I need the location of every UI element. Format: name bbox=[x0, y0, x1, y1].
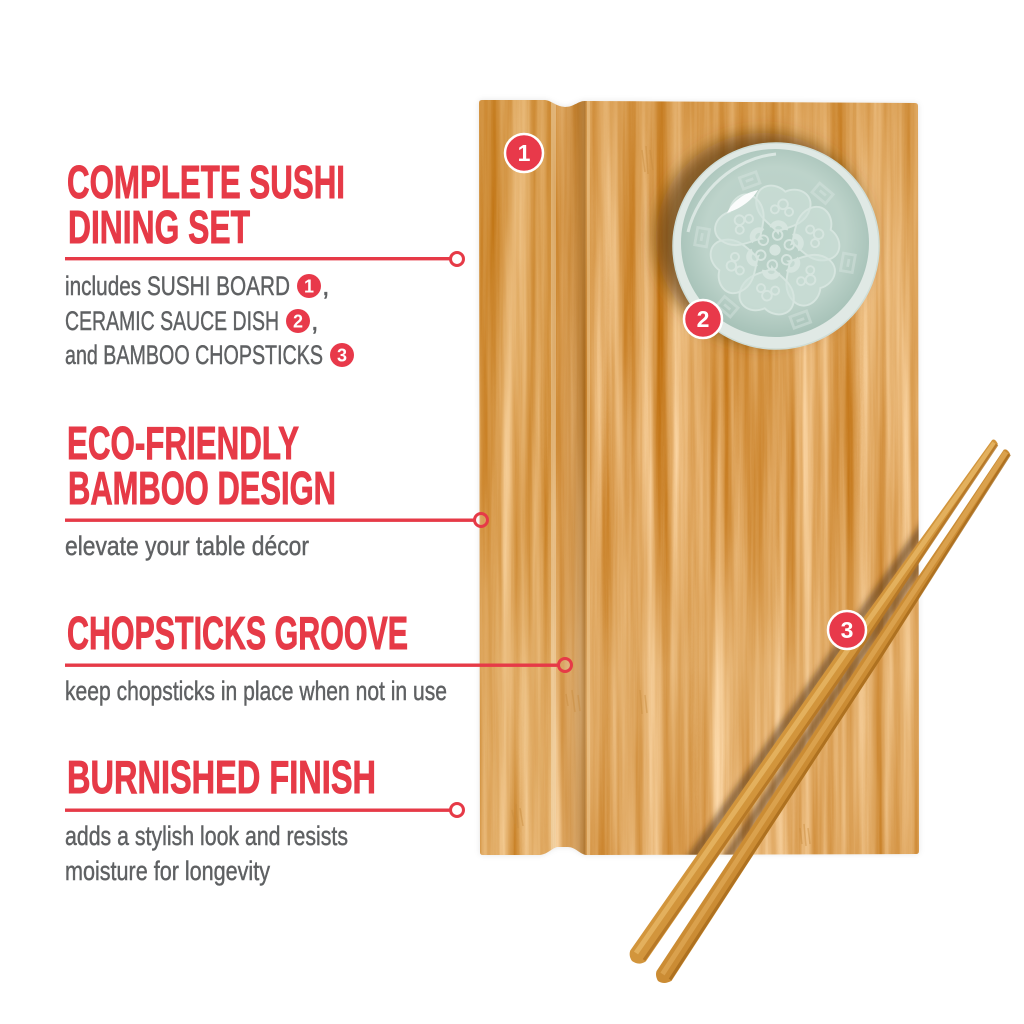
badge 2 bbox=[684, 300, 722, 338]
leader line bbox=[65, 804, 464, 816]
chopsticks groove bbox=[551, 95, 590, 860]
description line 2: CERAMIC SAUCE DISH bbox=[65, 306, 279, 336]
description line 3: 3 bbox=[337, 346, 347, 366]
chopstick right bbox=[656, 449, 1010, 983]
feature: complete sushi dining set bbox=[65, 156, 464, 370]
description: elevate your table décor bbox=[65, 531, 309, 561]
leader line bbox=[65, 658, 572, 672]
infographic bbox=[65, 98, 1011, 983]
heading second line: DINING SET bbox=[68, 201, 250, 253]
heading: COMPLETE SUSHI bbox=[67, 156, 345, 208]
heading: CHOPSTICKS GROOVE bbox=[67, 607, 408, 659]
badge 1 bbox=[505, 134, 543, 172]
icon: ceramic sauce dish bbox=[673, 143, 879, 349]
description line 2: , bbox=[311, 306, 319, 336]
icon: bamboo chopsticks bbox=[630, 440, 1010, 983]
dish shadow bbox=[656, 133, 870, 343]
description: keep chopsticks in place when not in use bbox=[65, 676, 447, 706]
description line 1: includes SUSHI BOARD bbox=[65, 271, 290, 301]
feature: burnished finish bbox=[65, 751, 464, 886]
description line 1: 1 bbox=[304, 276, 314, 296]
description line 1: , bbox=[322, 271, 330, 301]
badge 3 bbox=[828, 611, 866, 649]
leader line bbox=[65, 252, 464, 266]
heading: ECO-FRIENDLY bbox=[67, 417, 299, 469]
description line 2: 2 bbox=[293, 312, 303, 332]
leader line bbox=[65, 514, 488, 526]
description line 1: adds a stylish look and resists bbox=[65, 821, 348, 851]
feature: chopsticks groove bbox=[65, 607, 572, 706]
badge 1: 1 bbox=[518, 140, 531, 166]
heading: BURNISHED FINISH bbox=[67, 751, 376, 803]
badge 3: 3 bbox=[841, 617, 853, 643]
bamboo knots bbox=[512, 146, 810, 846]
chopstick left bbox=[630, 440, 998, 964]
description line 2: moisture for longevity bbox=[65, 856, 270, 886]
badge 2: 2 bbox=[697, 306, 709, 332]
description line 3: and BAMBOO CHOPSTICKS bbox=[65, 340, 323, 370]
feature: eco-friendly bamboo design bbox=[65, 417, 488, 561]
panel: bamboo sushi board bbox=[478, 98, 920, 856]
chopstick shadows bbox=[684, 520, 919, 855]
heading second line: BAMBOO DESIGN bbox=[68, 462, 336, 514]
